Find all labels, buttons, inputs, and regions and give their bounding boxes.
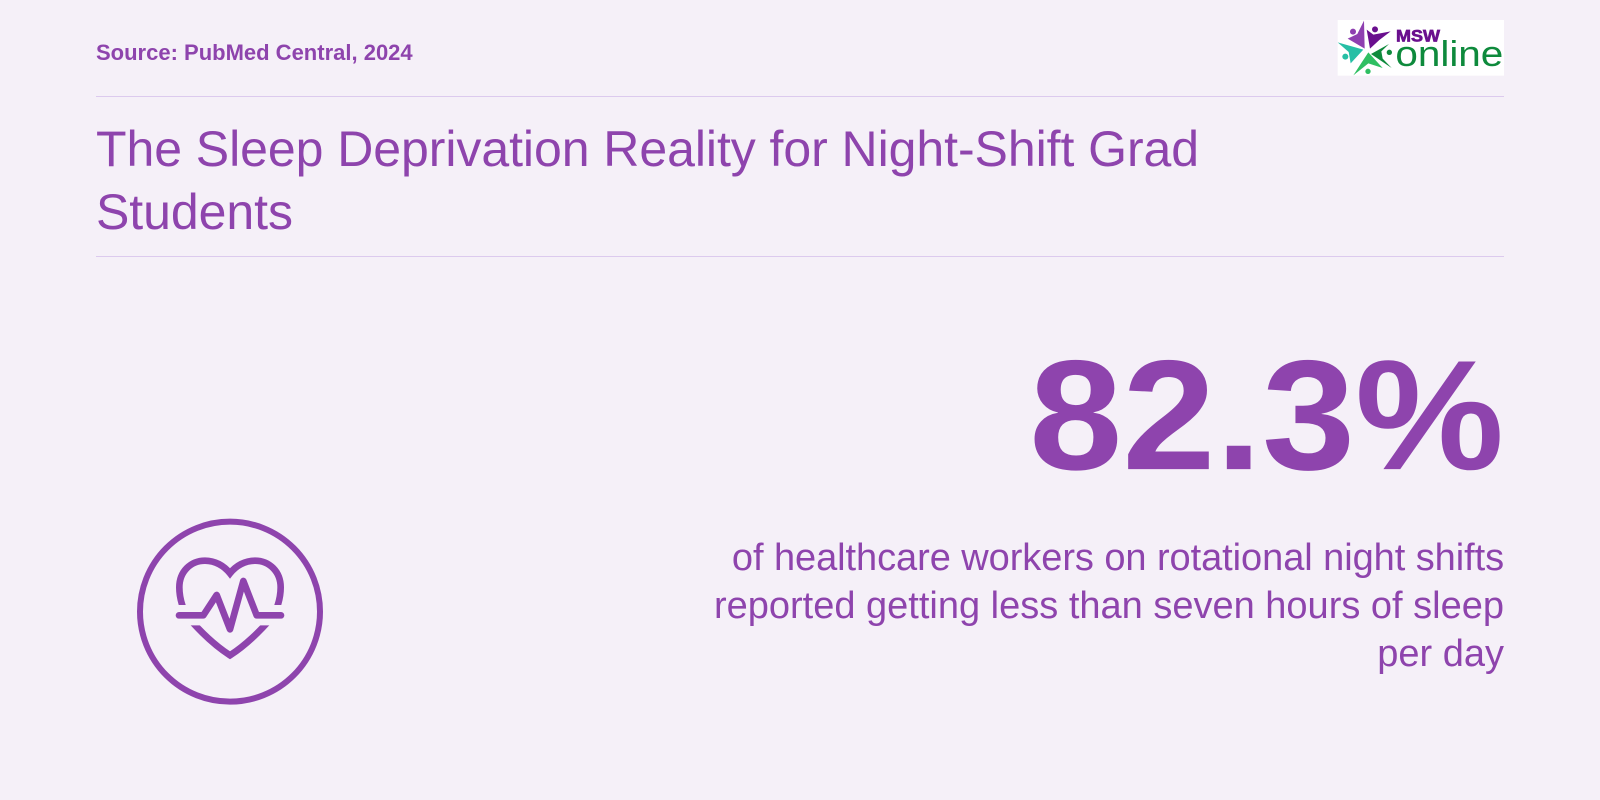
description text: per day bbox=[1377, 633, 1504, 675]
big statistic: 82.3% bbox=[1029, 328, 1504, 503]
divider bbox=[96, 96, 1504, 97]
title: The Sleep Deprivation Reality for Night-Shift Grad bbox=[96, 121, 1199, 177]
logo: MSW online: online bbox=[1395, 33, 1503, 74]
divider bbox=[96, 256, 1504, 257]
logo: MSW online bbox=[1338, 20, 1504, 76]
description text bbox=[714, 537, 1504, 675]
icon: heart with pulse in circle bbox=[137, 518, 323, 705]
title: Students bbox=[96, 184, 293, 240]
description text: reported getting less than seven hours of sleep bbox=[714, 585, 1504, 627]
source line: Source: PubMed Central, 2024 bbox=[96, 40, 413, 65]
title bbox=[96, 121, 1199, 240]
logo: MSW online: MSW bbox=[1396, 27, 1440, 46]
description text: of healthcare workers on rotational night shifts bbox=[732, 537, 1504, 579]
